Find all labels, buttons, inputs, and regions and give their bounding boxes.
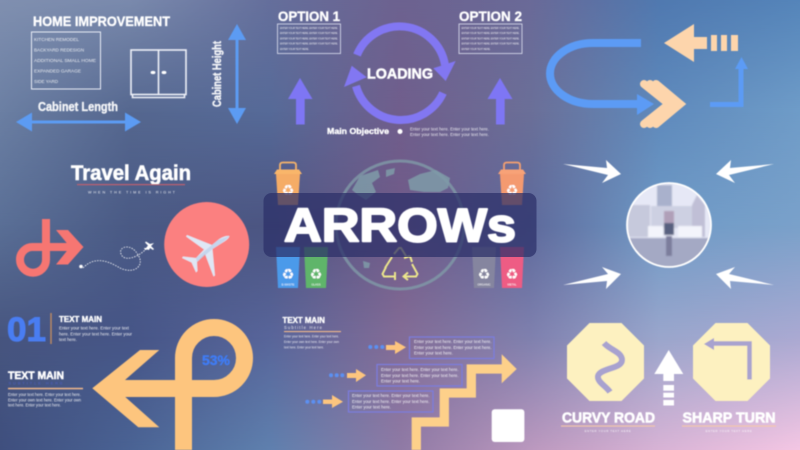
label: loading: LOADING [367, 66, 433, 82]
underline [77, 184, 185, 185]
panel: converging arrows and photo [563, 160, 774, 289]
label: cabinet height: Cabinet Height [212, 41, 224, 107]
heading: travel again: Travel Again [71, 162, 191, 185]
text block: subtitle: text here. Enter your text here. [8, 402, 61, 408]
icon: recycle triangle [382, 248, 418, 280]
label: 53%: 53% [202, 353, 230, 368]
option 1: ENTER YOUR TEXT HERE. ENTER YOUR TEXT HERE. [280, 38, 338, 40]
list box: BACKYARD REDESIGN [34, 48, 84, 52]
text block: text main: Enter your text here. Enter your text [59, 326, 130, 332]
icon: globe [336, 161, 464, 289]
text block: subtitle here: Enter your text here. Enter your text here. [284, 334, 339, 338]
label: curvy road: ENTER YOUR TEXT HERE [585, 429, 631, 433]
row 2: dots, arrow and box: Enter your text here. [381, 378, 420, 384]
row 1: dots, arrow and box: Enter your text here. Enter your text here. [414, 345, 492, 350]
circular photo [627, 183, 711, 267]
option 2: ENTER YOUR TEXT HERE. ENTER YOUR TEXT HERE. [462, 32, 520, 35]
row 3: dots, arrow and box: Enter your text here. Enter your text here. [352, 393, 430, 398]
arrow: coral looped [20, 219, 84, 273]
arrow: horizontal double [16, 112, 141, 132]
cycle arrows [344, 26, 456, 120]
option 2: ENTER YOUR TEXT HERE. [462, 48, 491, 51]
icon: gray bin [472, 247, 496, 288]
label: curvy road: CURVY ROAD [562, 411, 655, 427]
row 3: dots, arrow and box: Enter your text here. [352, 404, 391, 410]
title: ARROWs: ARROWs [284, 200, 516, 252]
text block: text main: text here. [59, 337, 77, 343]
icon: green bin: ♻ [310, 267, 322, 283]
list box [32, 32, 100, 89]
label: curvy road [561, 411, 655, 433]
arrow: white top-right [716, 160, 774, 183]
row 1: dots, arrow and box: Enter your text here. [414, 350, 453, 356]
panel: loading cycle [278, 8, 522, 137]
icon: orange bin top left [274, 162, 302, 205]
arrow: peach chevrons [644, 84, 680, 124]
option 1: ENTER YOUR TEXT HERE. ENTER YOUR TEXT HERE. [280, 27, 338, 30]
banner panel [264, 193, 536, 257]
icon: orange bin top right [498, 162, 526, 205]
arrow: blue u-turn [550, 43, 654, 115]
option 1: ENTER YOUR TEXT HERE. ENTER YOUR TEXT HERE. [280, 32, 338, 35]
panel: top right arrows [550, 24, 748, 124]
option 2: ENTER YOUR TEXT HERE. ENTER YOUR TEXT HERE. [462, 42, 520, 46]
icon: gray bin: ♻ [478, 267, 490, 283]
main objective: Enter your text here. Enter your text here. [410, 126, 489, 132]
list box: ADDITIONAL SMALL HOME [34, 58, 96, 63]
arrow: white top-left [563, 160, 621, 183]
option 2 [459, 8, 522, 54]
icon: orange bin top left: ♻ [282, 183, 294, 199]
arrow: peach dashed left [664, 24, 738, 62]
divider [50, 313, 52, 344]
icon: pink bin [500, 247, 524, 288]
text block: subtitle: TEXT MAIN [8, 370, 64, 382]
sign: sharp turn [693, 323, 770, 401]
option 1: OPTION 1 [278, 8, 340, 24]
label: sharp turn: ENTER YOUR TEXT HERE [706, 429, 752, 433]
arrow: vertical double [228, 24, 246, 124]
arrow: stairs [416, 354, 517, 450]
icon: cabinet [131, 50, 186, 98]
option 2: ENTER YOUR TEXT HERE. ENTER YOUR TEXT HERE. [462, 38, 520, 40]
white square [492, 409, 524, 442]
icon: green bin [304, 247, 328, 288]
row 2: dots, arrow and box: Enter your text here. Enter your text here. [381, 373, 458, 378]
label: cabinet length: Cabinet Length [38, 99, 118, 114]
icon: green bin: GLASS [311, 282, 321, 286]
number 01: 01 [7, 311, 46, 349]
arrow: big peach looped [92, 327, 244, 450]
row 3: dots, arrow and box: Enter your text here. Enter your text here. [352, 399, 430, 404]
text block: subtitle here: TEXT MAIN [282, 315, 325, 325]
dashed flight path [79, 242, 154, 270]
arrow: white bottom-right [716, 267, 774, 289]
text block: text main: here. Enter your text here. Enter your [59, 332, 132, 338]
panel: recycling globe [274, 161, 526, 289]
main objective [327, 126, 489, 137]
icon: orange bin top right: ♻ [506, 183, 518, 199]
panel: travel again [20, 162, 249, 287]
row 2: dots, arrow and box [329, 364, 462, 386]
main objective: Enter your text here. Enter your text here. [410, 132, 489, 137]
text block: subtitle [8, 370, 83, 408]
sign: curvy road [567, 323, 644, 401]
list box: KITCHEN REMODEL [34, 37, 80, 42]
list box: SIDE YARD [34, 79, 58, 84]
option 1: ENTER YOUR TEXT HERE. ENTER YOUR TEXT HERE. [280, 42, 338, 46]
icon: blue bin [276, 247, 300, 288]
title banner [264, 193, 536, 257]
text block: subtitle here [282, 315, 341, 350]
panel: stair arrow [282, 315, 524, 450]
text block: subtitle: SUBTITLE HERE [8, 382, 63, 386]
panel: bottom left looped arrow [7, 311, 244, 450]
list box: EXPANDED GARAGE [34, 68, 81, 74]
panel: home improvement [16, 13, 246, 132]
panel: road signs [561, 323, 776, 433]
row 3: dots, arrow and box [305, 391, 433, 412]
circle with plane [164, 202, 249, 287]
arrow: up left [288, 78, 312, 124]
icon: plane [182, 235, 230, 276]
icon: pink bin: METAL [507, 282, 517, 286]
option 2: ENTER YOUR TEXT HERE. ENTER YOUR TEXT HERE. [462, 27, 520, 30]
icon: gray bin: ORGANIC [477, 282, 491, 286]
subtitle: WHEN THE TIME IS RIGHT [88, 190, 176, 194]
row 1: dots, arrow and box: Enter your text here. Enter your text here. [414, 339, 492, 344]
row 1: dots, arrow and box [368, 337, 494, 358]
icon: blue bin: E-WASTE [282, 282, 294, 286]
text block: subtitle: Enter your text here. Enter your text here. [8, 392, 81, 397]
arrow: blue right-angle up [710, 57, 748, 104]
row 2: dots, arrow and box: Enter your text here. Enter your text here. [381, 367, 458, 372]
text block: subtitle here: text here. Enter your text here. [284, 346, 324, 350]
icon: pink bin: ♻ [506, 267, 518, 283]
icon: blue bin: ♻ [282, 267, 294, 283]
text block: subtitle here: Subtitle Here [284, 325, 323, 330]
option 2: OPTION 2 [459, 8, 522, 24]
option 1: ENTER YOUR TEXT HERE. [280, 48, 309, 51]
heading: home improvement: HOME IMPROVEMENT [33, 13, 170, 29]
main objective: Main Objective [327, 126, 389, 136]
text block: subtitle here: Enter your own text here. Enter your own [284, 340, 339, 344]
text block: subtitle: Enter your own text here. Enter your own [8, 398, 82, 402]
arrow: up right [488, 78, 512, 124]
option 1 [278, 8, 340, 54]
text block: text main: TEXT MAIN [59, 314, 102, 324]
label: sharp turn: SHARP TURN [682, 411, 776, 427]
arrow: white dashed up [654, 350, 683, 406]
text block: text main [59, 314, 132, 343]
arrow: white bottom-left [563, 267, 621, 289]
